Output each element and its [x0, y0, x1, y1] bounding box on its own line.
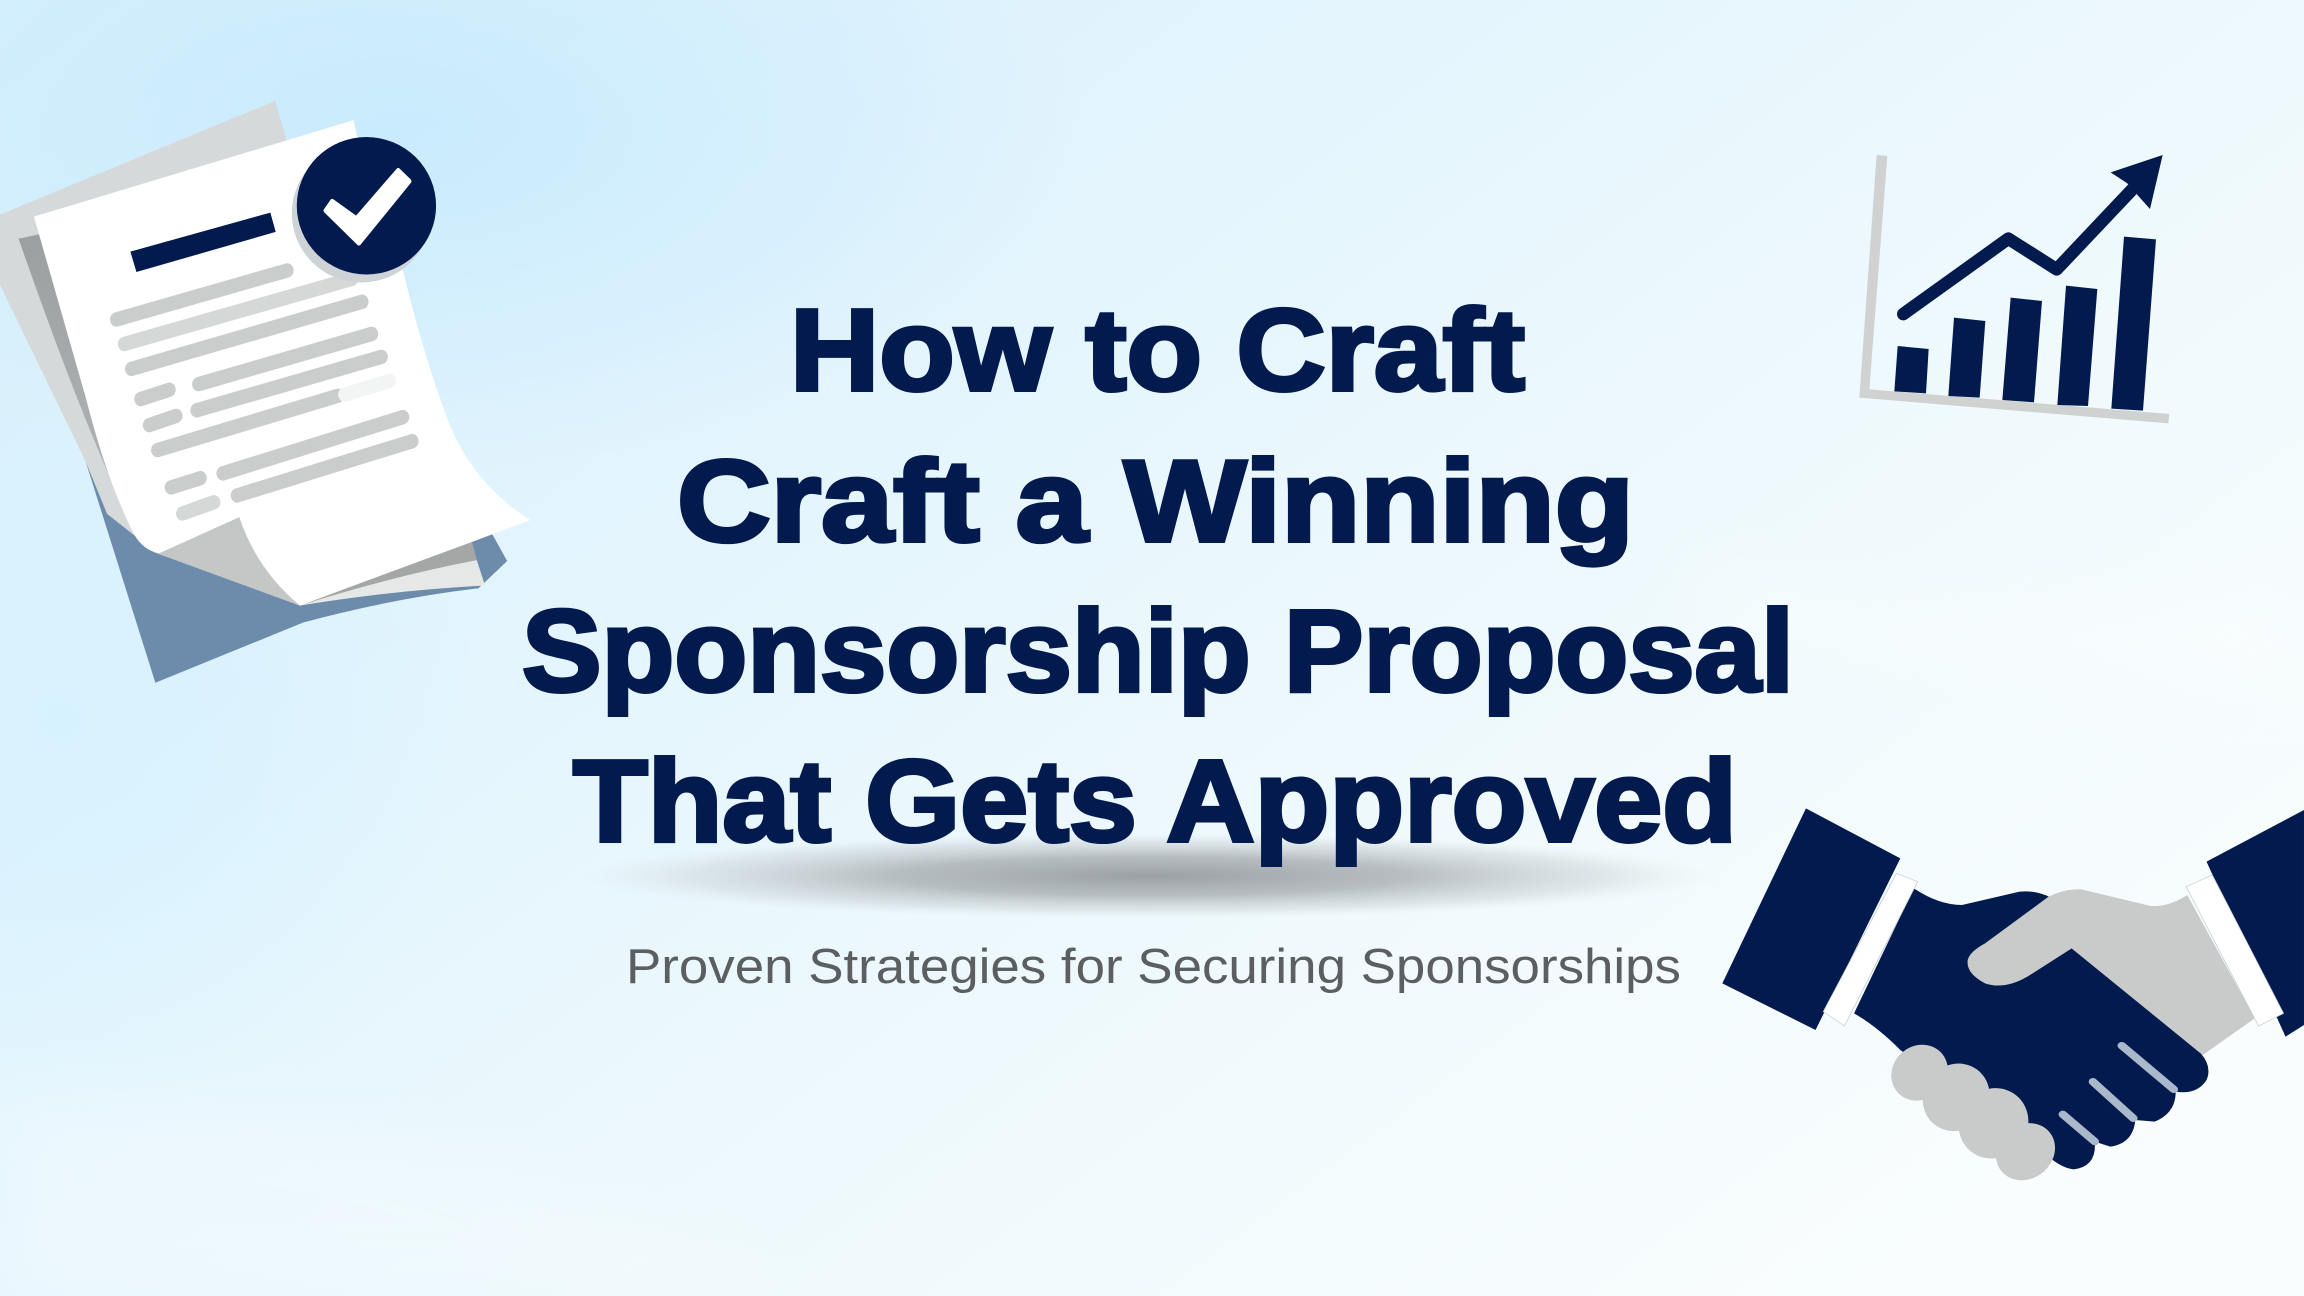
inner sheet edge — [19, 234, 137, 536]
grey fingers — [1883, 1038, 2066, 1189]
chart bars — [1894, 237, 2156, 411]
title shadow — [580, 833, 1720, 919]
main page — [34, 120, 530, 606]
finger separators — [2063, 1046, 2174, 1142]
page fold — [154, 516, 302, 606]
title line 3: Sponsorship Proposal — [522, 586, 1794, 716]
title line 4: That Gets Approved — [573, 736, 1737, 866]
document shadow — [86, 462, 507, 683]
title line 1: How to Craft — [790, 285, 1525, 415]
page heading bar — [130, 213, 276, 272]
icon: growth chart — [1859, 155, 2169, 423]
check badge — [292, 137, 436, 283]
icon: approved document — [0, 101, 530, 683]
lower sheets — [300, 538, 485, 606]
title line 2: Craft a Winning — [677, 436, 1634, 566]
chart axes — [1859, 155, 2169, 423]
page text lines — [116, 270, 412, 514]
back sheet — [0, 101, 293, 542]
left sleeve — [1722, 808, 1900, 1030]
title — [522, 285, 1794, 866]
subtitle: Proven Strategies for Securing Sponsorships — [626, 940, 1681, 994]
icon: handshake — [1722, 808, 2304, 1189]
grey hand — [1968, 889, 2255, 1055]
right shirt cuff — [2186, 875, 2284, 1026]
navy hand — [1854, 888, 2208, 1169]
trend arrow — [1903, 155, 2163, 314]
left shirt cuff — [1823, 873, 1918, 1026]
right sleeve — [2207, 810, 2304, 1037]
